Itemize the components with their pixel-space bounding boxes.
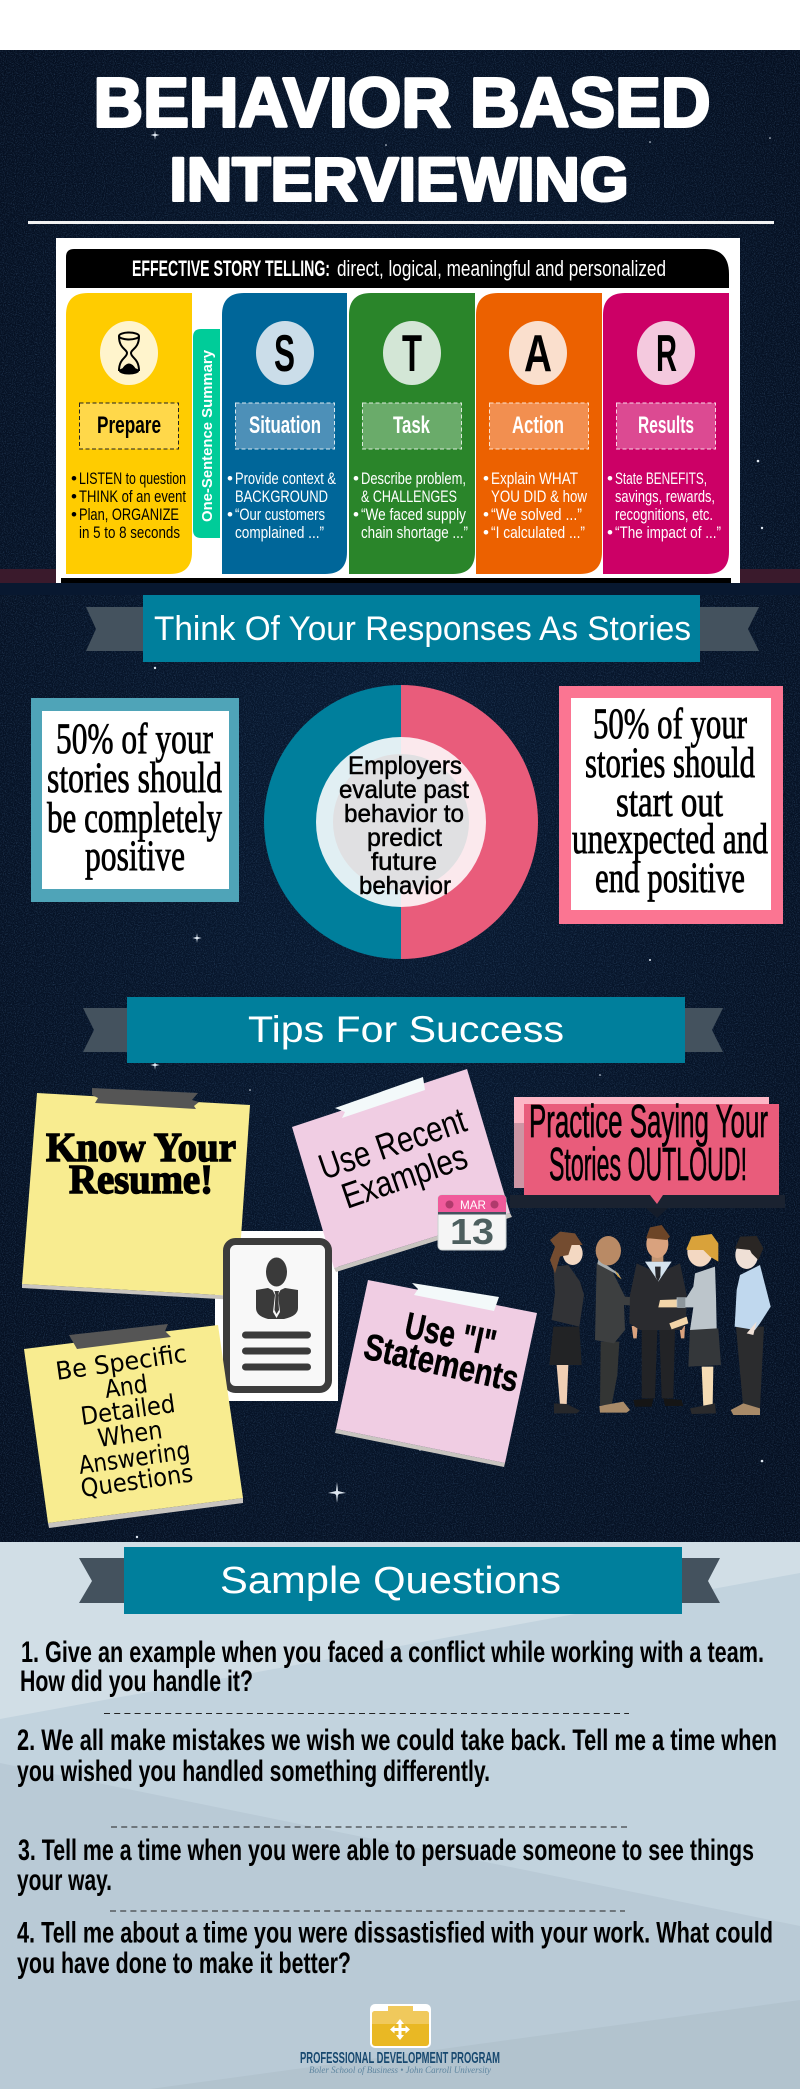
- text box: 50% unexpected then positive: end positive: [595, 855, 745, 902]
- card: prepare: •: [71, 505, 77, 524]
- card: results: [603, 293, 729, 574]
- icon: resume profile card: [226, 1242, 328, 1390]
- heading banner: sample questions: [79, 1547, 720, 1614]
- header bar: direct, logical, meaningful and personalized: [337, 256, 666, 281]
- figure: man in dark suit: [629, 1225, 687, 1407]
- card: action: [476, 293, 602, 574]
- card: action: Action: [512, 412, 564, 439]
- donut chart: employers evaluate past behavior: future: [371, 848, 437, 876]
- card: action: •: [483, 505, 489, 524]
- card: results: “The impact of ...”: [615, 523, 721, 542]
- heading banner: tips for success: Tips For Success: [248, 1009, 564, 1050]
- question list: How did you handle it?: [20, 1665, 253, 1698]
- title: [94, 64, 710, 214]
- title: INTERVIEWING: [170, 146, 628, 214]
- card: results: savings, rewards,: [615, 487, 715, 506]
- figure: bald man in grey suit: [595, 1236, 667, 1413]
- text box: 50% unexpected then positive: [559, 686, 783, 924]
- card: situation: Situation: [249, 412, 321, 439]
- text box: 50% completely positive: 50% of your: [56, 716, 213, 763]
- card: prepare: in 5 to 8 seconds: [79, 523, 180, 542]
- card: prepare: [66, 293, 192, 574]
- sticky note: be specific and detailed: When: [96, 1415, 164, 1453]
- illustration: business people shaking hands: [549, 1225, 771, 1415]
- card: task: •: [353, 469, 359, 488]
- card: task: Describe problem,: [361, 469, 466, 488]
- text box: 50% completely positive: be completely: [47, 795, 222, 842]
- sticky note: be specific and detailed: And: [103, 1369, 149, 1404]
- card: situation: S: [274, 325, 295, 383]
- card: situation: •: [227, 505, 233, 524]
- icon: hourglass: [100, 321, 158, 385]
- card: results: Results: [638, 412, 694, 439]
- question list: [17, 1636, 777, 1980]
- question list: you wished you handled something differently.: [17, 1755, 490, 1788]
- donut chart: employers evaluate past behavior: predict: [367, 824, 442, 852]
- icon: calendar march 13: MAR: [460, 1198, 486, 1212]
- card: action: YOU DID & how: [491, 487, 588, 506]
- card: action: “We solved ...”: [491, 505, 582, 524]
- logo: professional development program: Boler School of Business • John Carroll University: [309, 2065, 491, 2075]
- donut chart: employers evaluate past behavior: evalute past: [339, 776, 469, 804]
- donut chart: employers evaluate past behavior: Employers: [348, 752, 462, 780]
- title: BEHAVIOR BASED: [94, 64, 710, 142]
- card: situation: “Our customers: [235, 505, 325, 524]
- sticky note: be specific and detailed: Detailed: [79, 1389, 177, 1431]
- sticky note: be specific and detailed: [24, 1324, 243, 1528]
- card: task: T: [402, 325, 422, 383]
- card: action: •: [483, 469, 489, 488]
- heading banner: think of your responses as stories: Think Of Your Responses As Stories: [154, 610, 691, 648]
- card: situation: Provide context &: [235, 469, 336, 488]
- card: task: Task: [393, 412, 430, 439]
- card: results: •: [607, 469, 613, 488]
- donut chart: employers evaluate past behavior: behavior: [359, 872, 451, 900]
- sticky note: use recent examples: [292, 1069, 512, 1272]
- text box: 50% unexpected then positive: start out: [616, 779, 723, 826]
- sticky note: be specific and detailed: Answering: [77, 1436, 192, 1480]
- header bar: EFFECTIVE STORY TELLING:: [132, 256, 330, 281]
- card: situation: complained ...”: [235, 523, 324, 542]
- panel: STAR effective story telling chart: [56, 238, 740, 583]
- card: prepare: •: [71, 469, 77, 488]
- heading banner: sample questions: Sample Questions: [220, 1560, 561, 1602]
- sticky note: use I statements: Statements: [360, 1326, 522, 1400]
- panel: sample questions background: [0, 1542, 800, 2089]
- text box: 50% completely positive: positive: [85, 833, 185, 880]
- card: action: Explain WHAT: [491, 469, 578, 488]
- donut chart: employers evaluate past behavior: [264, 685, 538, 959]
- text box: 50% completely positive: stories should: [47, 755, 222, 802]
- icon: calendar march 13: [438, 1195, 506, 1252]
- figure: woman in black suit: [549, 1232, 584, 1413]
- card: task: & CHALLENGES: [361, 487, 457, 506]
- card: prepare: Prepare: [97, 412, 161, 439]
- icon: calendar march 13: 13: [450, 1211, 494, 1252]
- card: task: chain shortage ...”: [361, 523, 468, 542]
- logo: professional development program: PROFESSIONAL DEVELOPMENT PROGRAM: [300, 2050, 500, 2067]
- card: results: recognitions, etc.: [615, 505, 713, 524]
- side label: one-sentence summary: [193, 329, 220, 538]
- card: situation: [222, 293, 347, 574]
- card: prepare: •: [71, 487, 77, 506]
- card: task: •: [353, 505, 359, 524]
- card: prepare: LISTEN to question: [79, 469, 186, 488]
- text box: 50% completely positive: [31, 698, 239, 902]
- header bar: [66, 249, 729, 288]
- heading banner: tips for success: [83, 997, 723, 1063]
- sticky note: use I statements: Use "I": [401, 1305, 500, 1364]
- card: results: State BENEFITS,: [615, 469, 707, 488]
- card: situation: BACKGROUND: [235, 487, 328, 506]
- card: results: R: [656, 325, 677, 383]
- card: action: “I calculated ...”: [491, 523, 585, 542]
- heading banner: think of your responses as stories: [86, 595, 759, 662]
- side label: one-sentence summary: One-Sentence Summary: [199, 349, 216, 522]
- card: task: “We faced supply: [361, 505, 466, 524]
- sticky note: know your resume: Know Your: [46, 1124, 236, 1170]
- card: prepare: THINK of an event: [79, 487, 186, 506]
- card: situation: •: [227, 469, 233, 488]
- sticky note: be specific and detailed: Be Specific: [54, 1339, 189, 1386]
- sticky note: use recent examples: Use Recent: [313, 1099, 471, 1188]
- sticky note: use I statements: [335, 1280, 537, 1467]
- figure: blonde woman in grey jacket: [658, 1234, 721, 1414]
- card: action: A: [524, 325, 552, 383]
- card: action: •: [483, 523, 489, 542]
- figure: man in blue shirt: [731, 1236, 771, 1415]
- card: task: [349, 293, 475, 574]
- logo: professional development program: [300, 2004, 500, 2075]
- question list: your way.: [17, 1864, 112, 1897]
- card: prepare: Plan, ORGANIZE: [79, 505, 179, 524]
- card: results: •: [607, 523, 613, 542]
- callout: practice saying your stories outloud: [510, 1095, 785, 1218]
- donut chart: employers evaluate past behavior: behavior to: [344, 800, 464, 828]
- sticky note: be specific and detailed: Questions: [79, 1458, 195, 1503]
- question list: you have done to make it better?: [17, 1947, 351, 1980]
- sticky note: use recent examples: Examples: [336, 1135, 473, 1217]
- sticky note: know your resume: Resume!: [69, 1156, 213, 1202]
- sticky note: know your resume: [22, 1088, 250, 1300]
